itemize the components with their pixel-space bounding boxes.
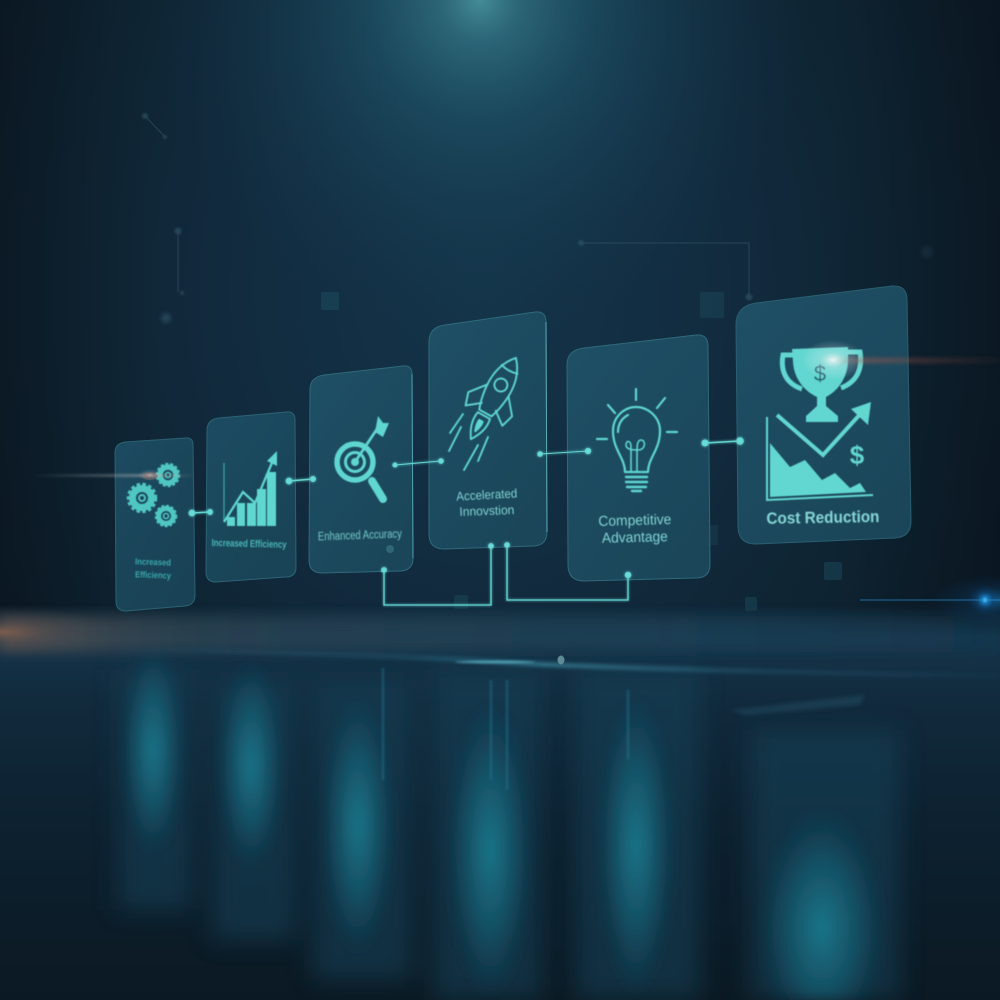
connector 3 to 4 lower xyxy=(382,544,493,605)
floor and reflections xyxy=(0,605,1000,1000)
icon: target and magnifier xyxy=(337,416,389,499)
icon: rocket xyxy=(449,346,538,470)
card: increased efficiency (chart) xyxy=(206,412,296,582)
icon: trophy xyxy=(782,347,861,422)
reflection: glows xyxy=(123,645,884,1000)
connector 4 to 5 xyxy=(538,448,591,456)
lens flare on gears xyxy=(30,469,195,481)
icon: gears xyxy=(128,464,179,526)
horizon light line xyxy=(90,648,1000,676)
connectors between cards xyxy=(189,438,743,605)
icon: falling cost chart xyxy=(767,402,873,500)
faint background network lines xyxy=(142,113,933,611)
connector 5 to 6 xyxy=(702,438,743,446)
red lens flare on trophy xyxy=(801,340,1000,380)
connector 3 to 4 xyxy=(393,459,443,467)
icon: trophy: $ xyxy=(814,361,826,386)
reflection: card columns xyxy=(118,670,900,1000)
icon: falling cost chart: $ xyxy=(850,440,865,470)
label: Increased xyxy=(135,556,171,568)
right edge highlight xyxy=(412,374,413,558)
label: Cost Reduction xyxy=(766,507,880,528)
label xyxy=(456,486,518,519)
right edge highlight xyxy=(546,322,547,532)
card: cost reduction xyxy=(736,286,911,544)
connector 2 to 3 xyxy=(286,477,315,484)
label: Innovstion xyxy=(459,503,515,519)
label xyxy=(135,556,171,581)
connector 1 to 2 xyxy=(189,510,212,516)
label: Competitive xyxy=(598,512,672,530)
label: Enhanced Accuracy xyxy=(318,529,402,543)
card: accelerated innovation xyxy=(429,312,547,549)
floor glare xyxy=(730,695,865,715)
left orange flare xyxy=(0,606,120,658)
blue lens flare xyxy=(860,574,1000,626)
card: competitive advantage xyxy=(567,335,710,581)
label: Efficiency xyxy=(135,569,171,581)
label: Accelerated xyxy=(456,486,518,504)
card: enhanced accuracy xyxy=(309,366,413,573)
label: Increased Efficiency xyxy=(211,537,287,551)
icon: light bulb xyxy=(597,389,677,491)
small indicator dot xyxy=(386,545,394,553)
label: Advantage xyxy=(602,529,668,547)
horizon haze band xyxy=(0,616,1000,652)
reflection: sharp streaks xyxy=(383,668,628,790)
label xyxy=(598,512,672,547)
connector 4 to 5 lower xyxy=(505,543,631,600)
icon: bar chart with arrow xyxy=(224,451,277,526)
card: increased efficiency (gears) xyxy=(115,438,195,611)
